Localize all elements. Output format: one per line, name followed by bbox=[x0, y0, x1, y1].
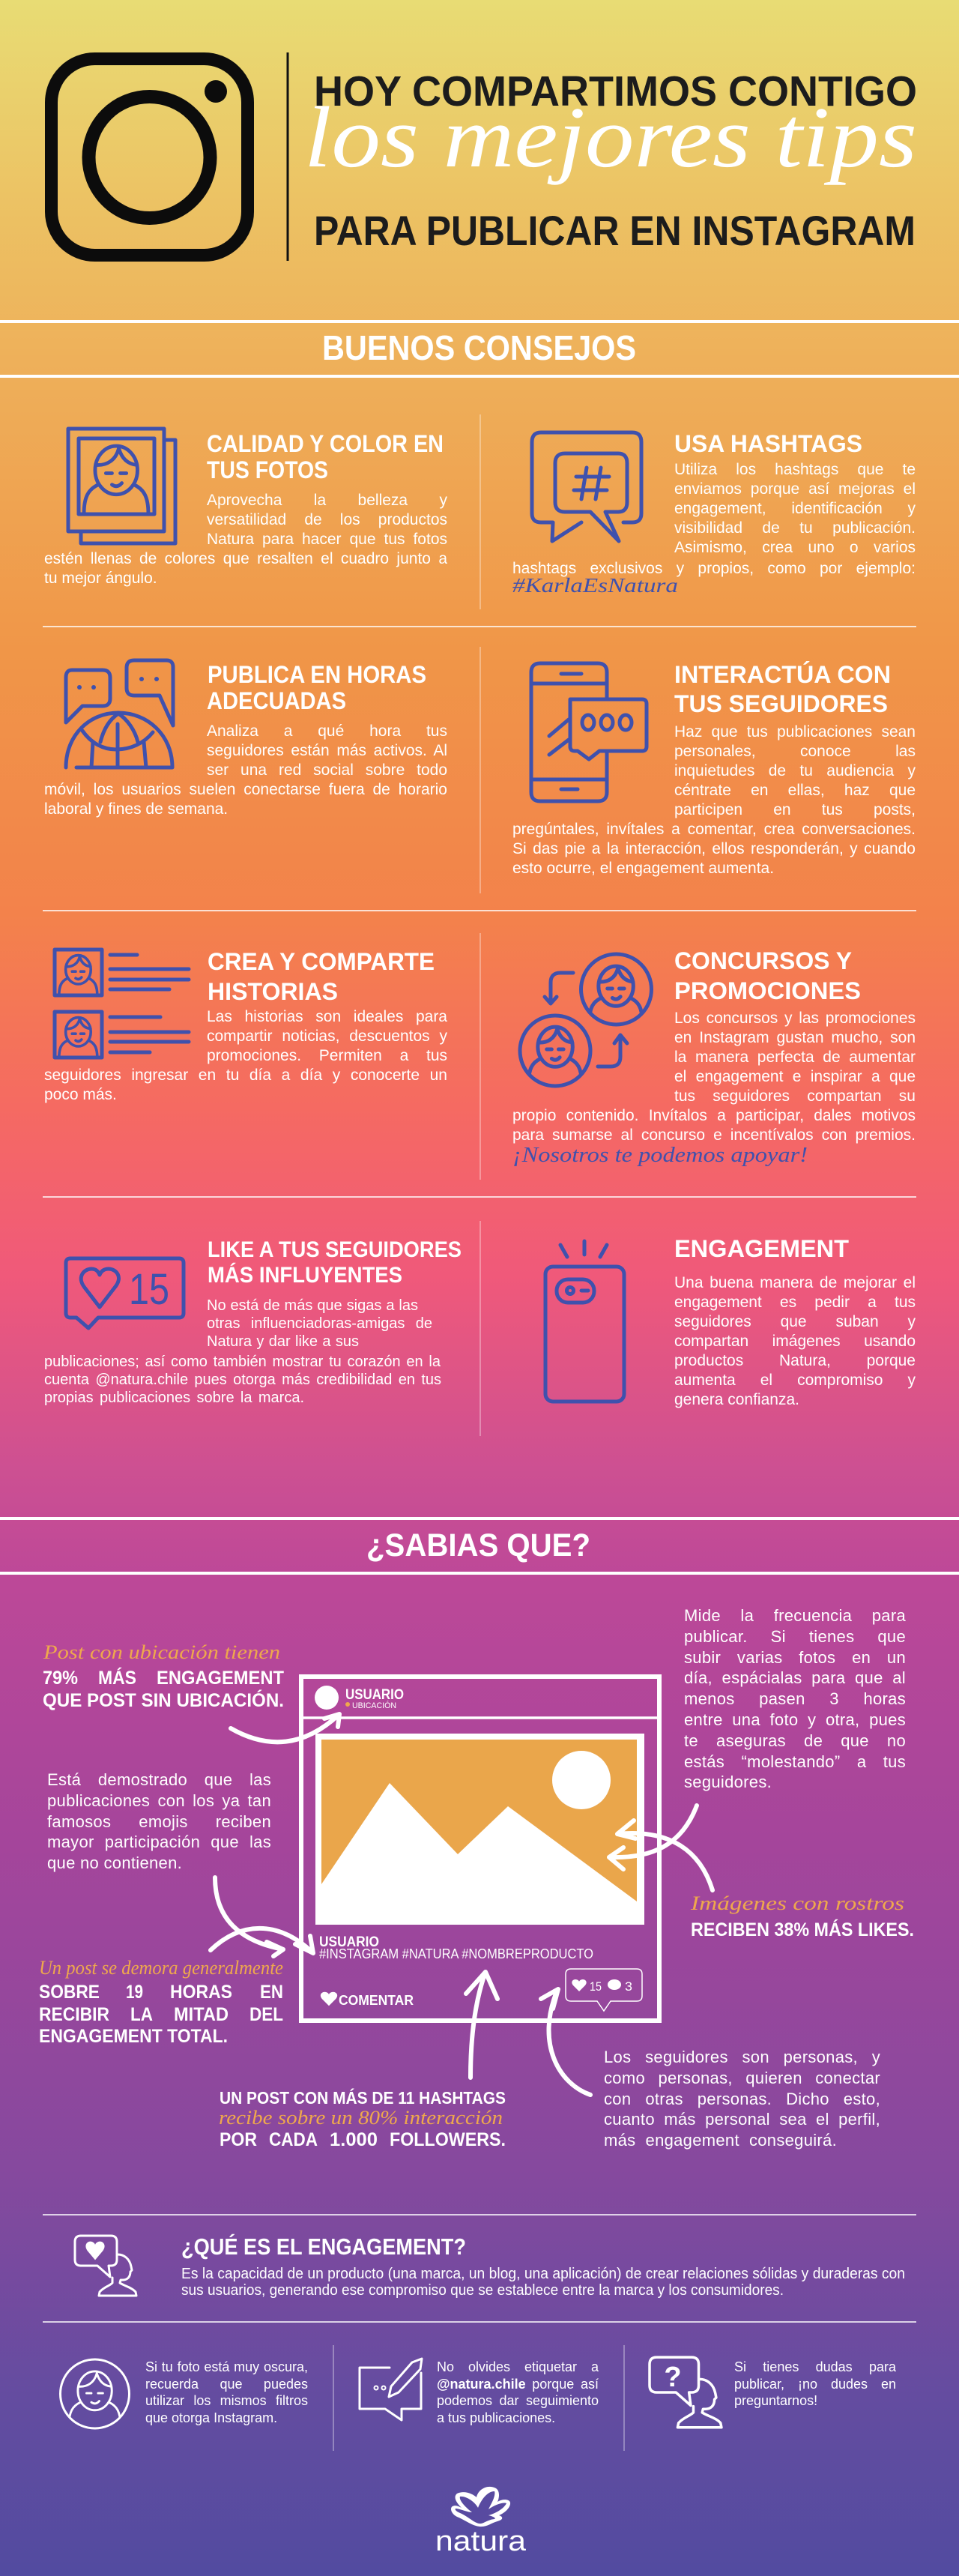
heading: MÁS INFLUYENTES bbox=[208, 1262, 402, 1288]
fact: 19 horas: DEL bbox=[249, 2004, 283, 2025]
panel: publica en horas adecuadas bbox=[44, 660, 447, 821]
section band: buenos consejos bbox=[0, 320, 959, 378]
heading: TUS SEGUIDORES bbox=[674, 690, 888, 717]
icon: story list bbox=[55, 950, 189, 1058]
fact: 11 hashtags: FOLLOWERS. bbox=[390, 2129, 506, 2150]
fact: 19 horas: EN bbox=[260, 1982, 283, 2003]
text block: recuerda que puedes bbox=[145, 2377, 308, 2392]
heading: CONCURSOS Y bbox=[674, 947, 852, 974]
text block bbox=[734, 2359, 896, 2429]
icon: hashtag chat bbox=[532, 432, 641, 541]
heading bbox=[208, 1237, 462, 1288]
panel: interactua con tus seguidores bbox=[512, 661, 916, 883]
heading bbox=[208, 948, 435, 1005]
natura logo bbox=[435, 2487, 527, 2557]
heading: HISTORIAS bbox=[208, 978, 338, 1005]
fact: post con ubicacion bbox=[43, 1641, 284, 1711]
panel: crea y comparte historias bbox=[44, 948, 447, 1106]
fact: 19 horas: 19 bbox=[126, 1982, 143, 2003]
text block: enviamos porque así mejoras el bbox=[674, 480, 916, 498]
text block: Las historias son ideales para bbox=[207, 1008, 447, 1025]
like bubble: 15 bbox=[590, 1979, 602, 1994]
fact: frecuencia: seguidores. bbox=[684, 1773, 772, 1791]
fact: 19 horas: MITAD bbox=[174, 2004, 229, 2025]
section band: sabias que bbox=[0, 1517, 959, 1575]
comment action: COMENTAR bbox=[339, 1993, 414, 2008]
text block bbox=[512, 1009, 916, 1148]
text block: Utiliza los hashtags que te bbox=[674, 461, 916, 478]
fact: 11 hashtags: 1.000 bbox=[330, 2129, 378, 2150]
text block: propio contenido. Invítalos a participar, dales motivos bbox=[512, 1107, 916, 1124]
text block: cuenta @natura.chile pues otorga más credibilidad en tus bbox=[44, 1372, 441, 1388]
icon: people exchange bbox=[520, 954, 652, 1086]
fact: 19 horas bbox=[39, 1957, 283, 2047]
fact: 11 hashtags: POR bbox=[220, 2129, 257, 2150]
panel: usa hashtags bbox=[512, 430, 916, 597]
avatar bbox=[315, 1686, 339, 1710]
heading bbox=[207, 430, 444, 483]
text block: Si das pie a la interacción, ellos responderán, y cuando bbox=[512, 840, 916, 857]
picture bbox=[315, 1734, 644, 1925]
heading bbox=[207, 661, 426, 714]
text block: sus usuarios, generando ese compromiso que se establece entre la marca y los consumidores. bbox=[181, 2282, 784, 2299]
icon: hand with question bubble bbox=[650, 2357, 721, 2428]
text block: tu mejor ángulo. bbox=[44, 570, 157, 587]
fact: 19 horas: HORAS bbox=[170, 1982, 232, 2003]
fact: emojis: Está demostrado que las bbox=[47, 1770, 271, 1789]
text block bbox=[145, 2359, 308, 2429]
icon: phone back bbox=[545, 1241, 624, 1402]
text block: Si tu foto está muy oscura, bbox=[145, 2359, 308, 2374]
text block bbox=[44, 491, 447, 590]
fact: post con ubicacion: Post con ubicación tienen bbox=[43, 1641, 280, 1663]
panel: calidad y color bbox=[44, 429, 447, 590]
icon: hand with question bubble: ? bbox=[664, 2362, 682, 2393]
heading bbox=[674, 661, 891, 717]
text block: engagement, identificación y bbox=[674, 500, 916, 517]
text block bbox=[44, 1007, 447, 1106]
text block: estén llenas de colores que resalten el cuadro junto a bbox=[44, 550, 447, 567]
text block: publicaciones; así como también mostrar tu corazón en la bbox=[44, 1354, 441, 1370]
icon: photos bbox=[68, 429, 175, 543]
text block bbox=[674, 1273, 916, 1413]
script callout: ¡Nosotros te podemos apoyar! bbox=[512, 1143, 808, 1167]
fact: frecuencia: subir varias fotos en un bbox=[684, 1648, 906, 1667]
icon: instagram logo bbox=[51, 58, 247, 255]
text block bbox=[512, 723, 916, 883]
text block: móvil, los usuarios suelen conectarse fuera de horario bbox=[44, 781, 447, 798]
text block: laboral y fines de semana. bbox=[44, 800, 228, 818]
text block: genera confianza. bbox=[674, 1391, 799, 1408]
instagram post mockup bbox=[301, 1677, 659, 2021]
text block: Natura para hacer que tus fotos bbox=[207, 531, 447, 548]
text block: Es la capacidad de un producto (una marca, un blog, una aplicación) de crear relaciones sólidas y duraderas con bbox=[181, 2266, 905, 2282]
fact: frecuencia: te aseguras de que no bbox=[684, 1731, 906, 1750]
text block: poco más. bbox=[44, 1086, 117, 1103]
text block: la manera perfecta de aumentar bbox=[674, 1049, 916, 1066]
header bbox=[51, 52, 917, 261]
fact: 11 hashtags: UN POST CON MÁS DE 11 HASHTAGS bbox=[220, 2087, 506, 2108]
script hashtag: #KarlaEsNatura bbox=[512, 574, 678, 597]
text block bbox=[44, 722, 447, 821]
panel: like a tus seguidores bbox=[44, 1237, 462, 1409]
fact: post con ubicacion: MÁS bbox=[98, 1667, 136, 1689]
text block bbox=[181, 2266, 905, 2299]
panel: que es el engagement bbox=[75, 2233, 905, 2299]
text block: No está de más que sigas a las bbox=[207, 1297, 418, 1314]
fact: emojis: famosos emojis reciben bbox=[47, 1812, 271, 1831]
heading bbox=[674, 947, 861, 1004]
like bubble bbox=[566, 1969, 642, 2011]
text block bbox=[437, 2359, 599, 2429]
fact: 11 hashtags: CADA bbox=[269, 2129, 318, 2150]
text block: propias publicaciones sobre la marca. bbox=[44, 1390, 304, 1406]
text block: Haz que tus publicaciones sean bbox=[674, 723, 916, 740]
title: los mejores tips bbox=[304, 90, 917, 186]
fact: 11 hashtags bbox=[219, 2087, 506, 2150]
fact: post con ubicacion: QUE POST SIN UBICACIÓN. bbox=[43, 1689, 284, 1711]
text block: utilizar los mismos filtros bbox=[145, 2393, 308, 2408]
text block: Una buena manera de mejorar el bbox=[674, 1274, 916, 1291]
text block: a tus publicaciones. bbox=[437, 2410, 555, 2425]
natura logo: natura bbox=[435, 2526, 527, 2557]
icon: like counter: 15 bbox=[129, 1265, 169, 1314]
text block: el engagement e inspirar a que bbox=[674, 1068, 916, 1085]
fact: 11 hashtags: recibe sobre un 80% interacción bbox=[219, 2107, 503, 2129]
text block: para sumarse al concurso e incentívalos con premios. bbox=[512, 1126, 916, 1144]
text block: visibilidad de tu publicación. bbox=[674, 519, 916, 537]
user and location bbox=[345, 1687, 404, 1710]
icon: note with pencil bbox=[360, 2359, 422, 2420]
fact: 19 horas: LA bbox=[130, 2004, 153, 2025]
caption: #INSTAGRAM #NATURA #NOMBREPRODUCTO bbox=[319, 1946, 593, 1961]
icon: like counter bbox=[66, 1258, 184, 1328]
text block: compartir noticias, descuentos y bbox=[207, 1028, 447, 1045]
panel: tip filtros bbox=[60, 2359, 308, 2429]
text block: personales, conoce las bbox=[674, 743, 916, 760]
heading: PROMOCIONES bbox=[674, 977, 861, 1004]
title: HOY COMPARTIMOS CONTIGO bbox=[314, 67, 917, 115]
fact: seguidores son personas: cuanto más personal sea el perfil, bbox=[604, 2110, 880, 2129]
text block: otras influenciadoras-amigas de bbox=[207, 1315, 432, 1332]
text block: hashtags exclusivos y propios, como por ejemplo: bbox=[512, 560, 916, 577]
fact: seguidores son personas: más engagement conseguirá. bbox=[604, 2131, 837, 2150]
fact: post con ubicacion: ENGAGEMENT bbox=[157, 1668, 284, 1689]
text block: No olvides etiquetar a bbox=[437, 2359, 599, 2374]
fact: emojis bbox=[47, 1770, 271, 1879]
fact: seguidores son personas: con otras personas. Dicho esto, bbox=[604, 2090, 880, 2108]
icon: hand with heart bubble bbox=[75, 2236, 136, 2296]
text block: seguidores están más activos. Al bbox=[207, 742, 447, 759]
fact: emojis: publicaciones con los ya tan bbox=[47, 1791, 271, 1810]
heading: INTERACTÚA CON bbox=[674, 661, 891, 688]
text block: preguntarnos! bbox=[734, 2393, 817, 2408]
fact: frecuencia: estás “molestando” a tus bbox=[684, 1752, 906, 1771]
text block: @natura.chile porque así bbox=[437, 2377, 599, 2392]
text block: engagement es pedir a tus bbox=[674, 1294, 916, 1311]
fact: frecuencia: Mide la frecuencia para bbox=[684, 1606, 906, 1625]
text block: ser una red social sobre todo bbox=[207, 761, 447, 779]
section band: sabias que: ¿SABIAS QUE? bbox=[366, 1527, 590, 1563]
text block: Natura y dar like a sus bbox=[207, 1333, 359, 1350]
heading: CALIDAD Y COLOR EN bbox=[207, 430, 444, 457]
fact: frecuencia bbox=[684, 1605, 906, 1796]
icon: face in circle bbox=[60, 2359, 129, 2428]
title bbox=[304, 67, 917, 254]
heading: ADECUADAS bbox=[207, 687, 346, 714]
heading: CREA Y COMPARTE bbox=[208, 948, 435, 975]
text block: aumenta el compromiso y bbox=[674, 1372, 916, 1389]
text block: que otorga Instagram. bbox=[145, 2410, 277, 2425]
text block: inquietudes de tu audiencia y bbox=[674, 762, 916, 779]
user and location: USUARIO bbox=[345, 1687, 404, 1703]
panel: tip dudas bbox=[650, 2357, 896, 2429]
panel: concursos y promociones bbox=[512, 947, 916, 1167]
like bubble: 3 bbox=[625, 1979, 632, 1994]
section band: buenos consejos: BUENOS CONSEJOS bbox=[322, 328, 636, 367]
fact: frecuencia: entre una foto y otra, pues bbox=[684, 1710, 906, 1729]
caption bbox=[319, 1934, 593, 1961]
text block: céntrate en ellas, haz que bbox=[674, 782, 916, 799]
text block: tus seguidores compartan su bbox=[674, 1088, 916, 1105]
text block: Aprovecha la belleza y bbox=[207, 492, 447, 509]
caption: USUARIO bbox=[319, 1934, 379, 1950]
text block: Analiza a qué hora tus bbox=[207, 723, 447, 740]
icon: globe and chats bbox=[66, 660, 173, 767]
text block: productos Natura, porque bbox=[674, 1352, 916, 1369]
text block: Si tienes dudas para bbox=[734, 2359, 896, 2374]
text block bbox=[44, 1297, 447, 1409]
fact: emojis: mayor participación que las bbox=[47, 1833, 271, 1851]
text block: compartan imágenes usando bbox=[674, 1333, 916, 1350]
text block bbox=[512, 460, 916, 580]
fact: imagenes con rostros: Imágenes con rostros bbox=[690, 1892, 904, 1914]
text block: esto ocurre, el engagement aumenta. bbox=[512, 860, 774, 877]
icon: phone with chat bbox=[531, 663, 647, 801]
panel: tip etiquetar bbox=[360, 2359, 599, 2429]
fact: frecuencia: menos pasen 3 horas bbox=[684, 1689, 906, 1708]
fact: 19 horas: ENGAGEMENT TOTAL. bbox=[39, 2026, 228, 2047]
text block: podemos dar seguimiento bbox=[437, 2393, 599, 2408]
fact: 19 horas: Un post se demora generalmente bbox=[39, 1957, 283, 1979]
text block: versatilidad de los productos bbox=[207, 511, 447, 528]
text block: pregúntales, invítales a comentar, crea conversaciones. bbox=[512, 821, 916, 838]
heading: ¿QUÉ ES EL ENGAGEMENT? bbox=[181, 2233, 466, 2260]
heading: TUS FOTOS bbox=[207, 456, 328, 483]
text block: promociones. Permiten a tus bbox=[207, 1047, 447, 1064]
arrows bbox=[211, 1714, 713, 2095]
fact: seguidores son personas bbox=[604, 2047, 880, 2155]
heading: PUBLICA EN HORAS bbox=[208, 661, 426, 688]
icon: natura flower bbox=[451, 2487, 510, 2527]
fact: 19 horas: RECIBIR bbox=[39, 2004, 109, 2025]
fact: post con ubicacion: 79% bbox=[43, 1668, 78, 1689]
heading: ENGAGEMENT bbox=[674, 1235, 849, 1262]
fact: seguidores son personas: como personas, quieren conectar bbox=[604, 2069, 880, 2087]
text block: Los concursos y las promociones bbox=[674, 1010, 916, 1027]
fact: frecuencia: publicar. Si tienes que bbox=[684, 1627, 906, 1646]
text block: seguidores ingresar en tu día a día y conocerte un bbox=[44, 1067, 447, 1084]
text block: seguidores que suban y bbox=[674, 1313, 916, 1330]
fact: emojis: que no contienen. bbox=[47, 1853, 182, 1872]
text block: en Instagram gustan mucho, son bbox=[674, 1029, 916, 1046]
fact: imagenes con rostros: RECIBEN 38% MÁS LIKES. bbox=[691, 1919, 914, 1940]
panel: engagement bbox=[545, 1235, 916, 1413]
user and location: UBICACIÓN bbox=[352, 1701, 396, 1710]
fact: seguidores son personas: Los seguidores son personas, y bbox=[604, 2048, 880, 2066]
heading: LIKE A TUS SEGUIDORES bbox=[208, 1237, 462, 1262]
fact: 19 horas: SOBRE bbox=[39, 1982, 100, 2003]
fact: imagenes con rostros bbox=[690, 1892, 914, 1940]
heading: USA HASHTAGS bbox=[674, 430, 862, 457]
text block: Asimismo, crea uno o varios bbox=[674, 539, 916, 556]
text block: publicar, ¡no dudes en bbox=[734, 2377, 896, 2392]
text block: participen en tus posts, bbox=[674, 801, 916, 818]
fact: frecuencia: día, espácialas para que al bbox=[684, 1668, 906, 1687]
